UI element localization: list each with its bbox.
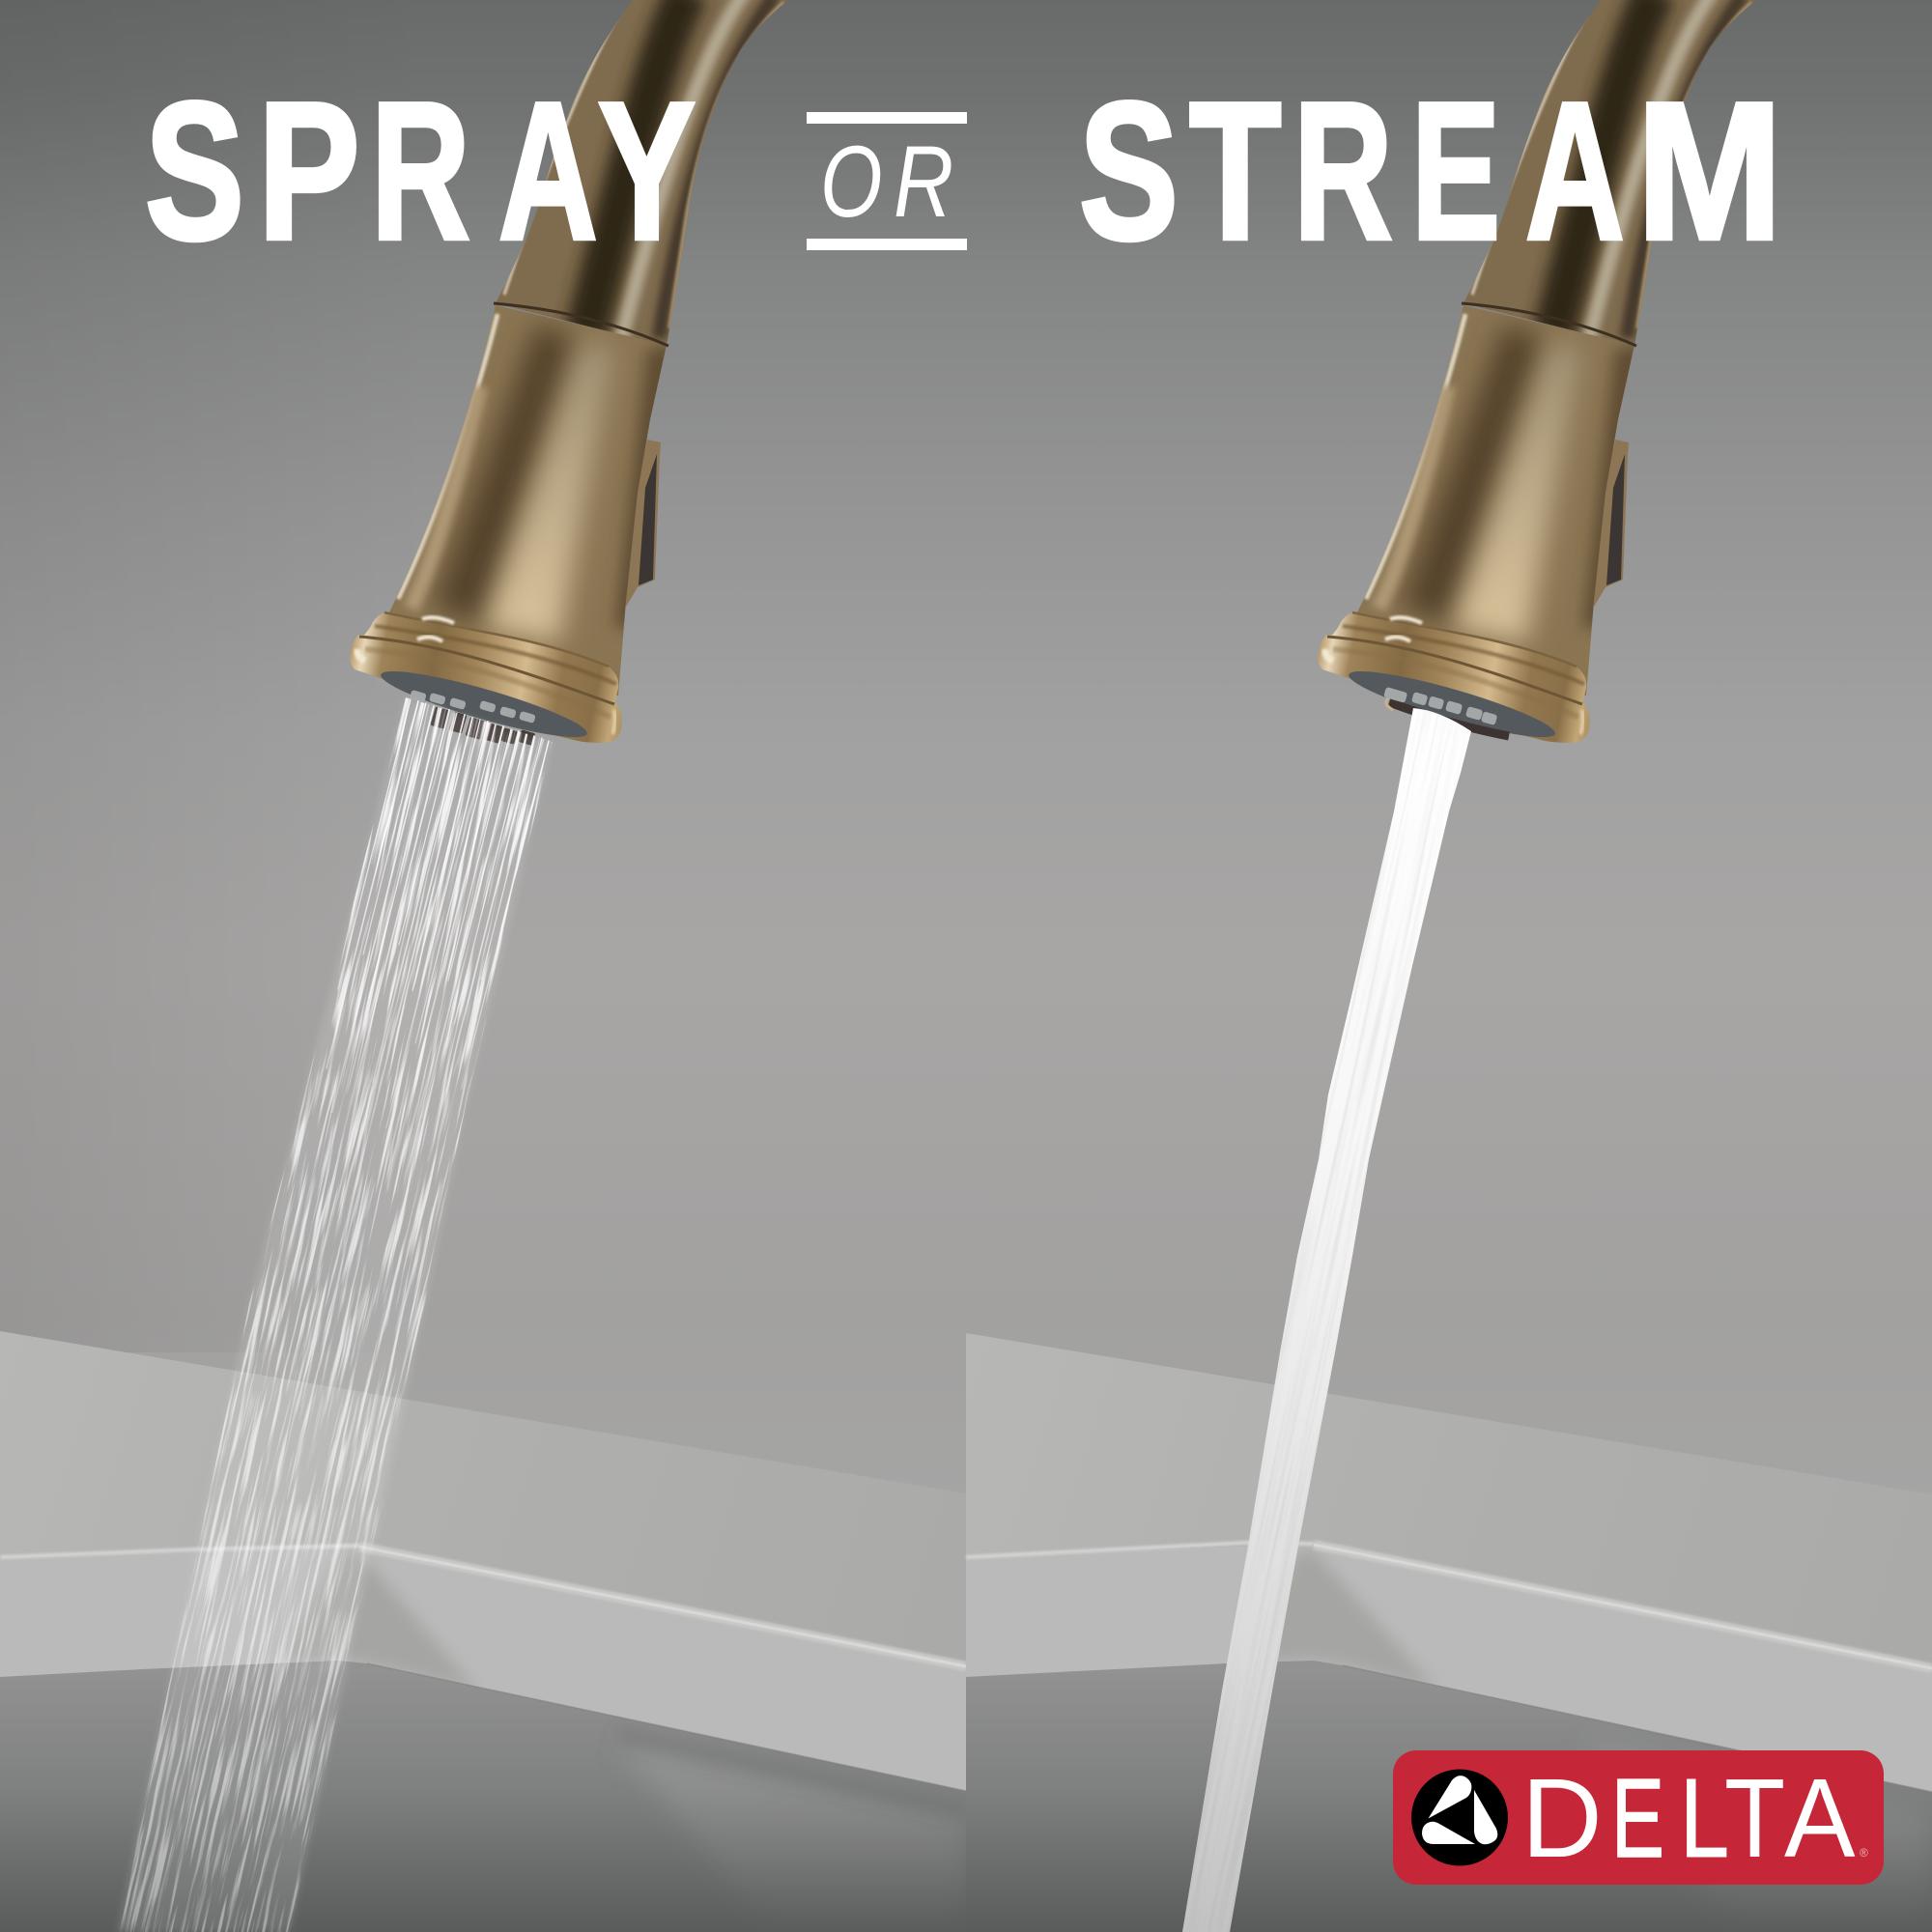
countertop ledge — [966, 1333, 1932, 1668]
corner shadow on edge — [1277, 1548, 1430, 1683]
or divider: bottom bar — [807, 239, 967, 250]
faucet (stream) — [1318, 0, 1756, 748]
title: SPRAY: R — [371, 62, 470, 281]
individual jets — [327, 699, 549, 1201]
spray haze — [117, 697, 553, 1932]
aerator nozzles — [1383, 687, 1509, 736]
sink front edge — [0, 1546, 966, 1791]
back wall — [966, 0, 1932, 1546]
sink front edge — [966, 1544, 1932, 1792]
panel: stream scene (right) — [966, 0, 1932, 1932]
or label: R — [894, 126, 953, 239]
title: STREAM: M — [1636, 62, 1783, 281]
counter highlight line — [0, 1546, 966, 1666]
basin lip shadow — [618, 1734, 966, 1811]
title: STREAM: S — [1079, 62, 1179, 281]
stream fibre texture — [1213, 711, 1457, 1754]
title: SPRAY: S — [145, 62, 244, 281]
faucet (spray) — [350, 0, 788, 748]
countertop ledge — [0, 1331, 966, 1666]
title: STREAM: R — [1293, 62, 1393, 281]
logo wordmark: A — [1784, 1755, 1855, 1881]
logo: Delta badge — [1393, 1750, 1884, 1885]
solid water stream — [1182, 708, 1471, 1932]
basin interior — [0, 1661, 966, 1932]
logo wordmark: D — [1521, 1755, 1603, 1881]
logo wordmark — [1521, 1755, 1868, 1881]
title: SPRAY: A — [498, 62, 598, 281]
icon: Delta emblem — [1411, 1770, 1508, 1866]
or label — [820, 126, 953, 239]
basin interior — [966, 1661, 1932, 1932]
title: SPRAY: Y — [598, 62, 696, 281]
spray water — [107, 691, 582, 1932]
back wall — [0, 0, 966, 1546]
basin light patch — [1584, 1744, 1932, 1932]
counter highlight line — [966, 1543, 1932, 1668]
title: STREAM — [1079, 62, 1783, 281]
title: STREAM: E — [1411, 62, 1501, 281]
or label: O — [820, 126, 883, 239]
sink lip line — [367, 1663, 966, 1791]
title: SPRAY — [145, 62, 696, 281]
logo wordmark: L — [1680, 1755, 1729, 1881]
aerator nozzles — [410, 690, 536, 746]
logo wordmark: T — [1724, 1755, 1785, 1881]
title: SPRAY: P — [258, 62, 359, 281]
sink lip line — [1343, 1665, 1932, 1792]
title: STREAM: T — [1189, 62, 1282, 281]
spray streak texture — [107, 691, 582, 1932]
corner shadow on edge — [286, 1551, 469, 1685]
panel: spray scene (left) — [0, 0, 966, 1932]
logo wordmark: E — [1611, 1755, 1663, 1881]
basin light patch — [618, 1744, 966, 1932]
logo wordmark: ® — [1860, 1846, 1868, 1860]
or divider: top bar — [807, 112, 967, 124]
wall side shading — [0, 0, 966, 1352]
title: STREAM: A — [1525, 62, 1625, 281]
